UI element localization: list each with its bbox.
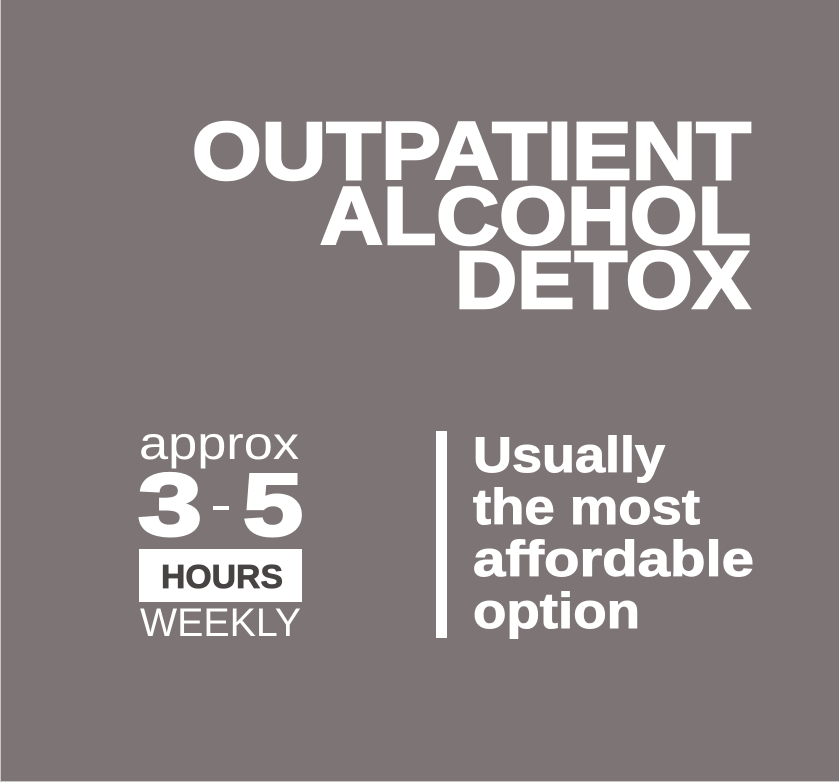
description text: the most xyxy=(473,479,700,535)
hours range 3-5 xyxy=(138,455,303,554)
title xyxy=(192,106,751,326)
title: OUTPATIENT xyxy=(192,106,751,197)
title: ALCOHOL xyxy=(320,171,751,262)
hours range 3-5: 3 xyxy=(138,455,202,554)
approx label: approx xyxy=(139,417,299,469)
time commitment block xyxy=(138,417,303,645)
hours box xyxy=(139,549,302,602)
hours range 3-5: 5 xyxy=(243,455,303,554)
description text: affordable xyxy=(473,531,754,587)
title: DETOX xyxy=(455,235,750,326)
description text xyxy=(473,427,754,639)
description text: Usually xyxy=(473,427,665,483)
hours box: HOURS xyxy=(161,558,283,595)
vertical divider xyxy=(436,431,447,638)
description text: option xyxy=(473,583,640,639)
weekly label: WEEKLY xyxy=(140,601,301,645)
